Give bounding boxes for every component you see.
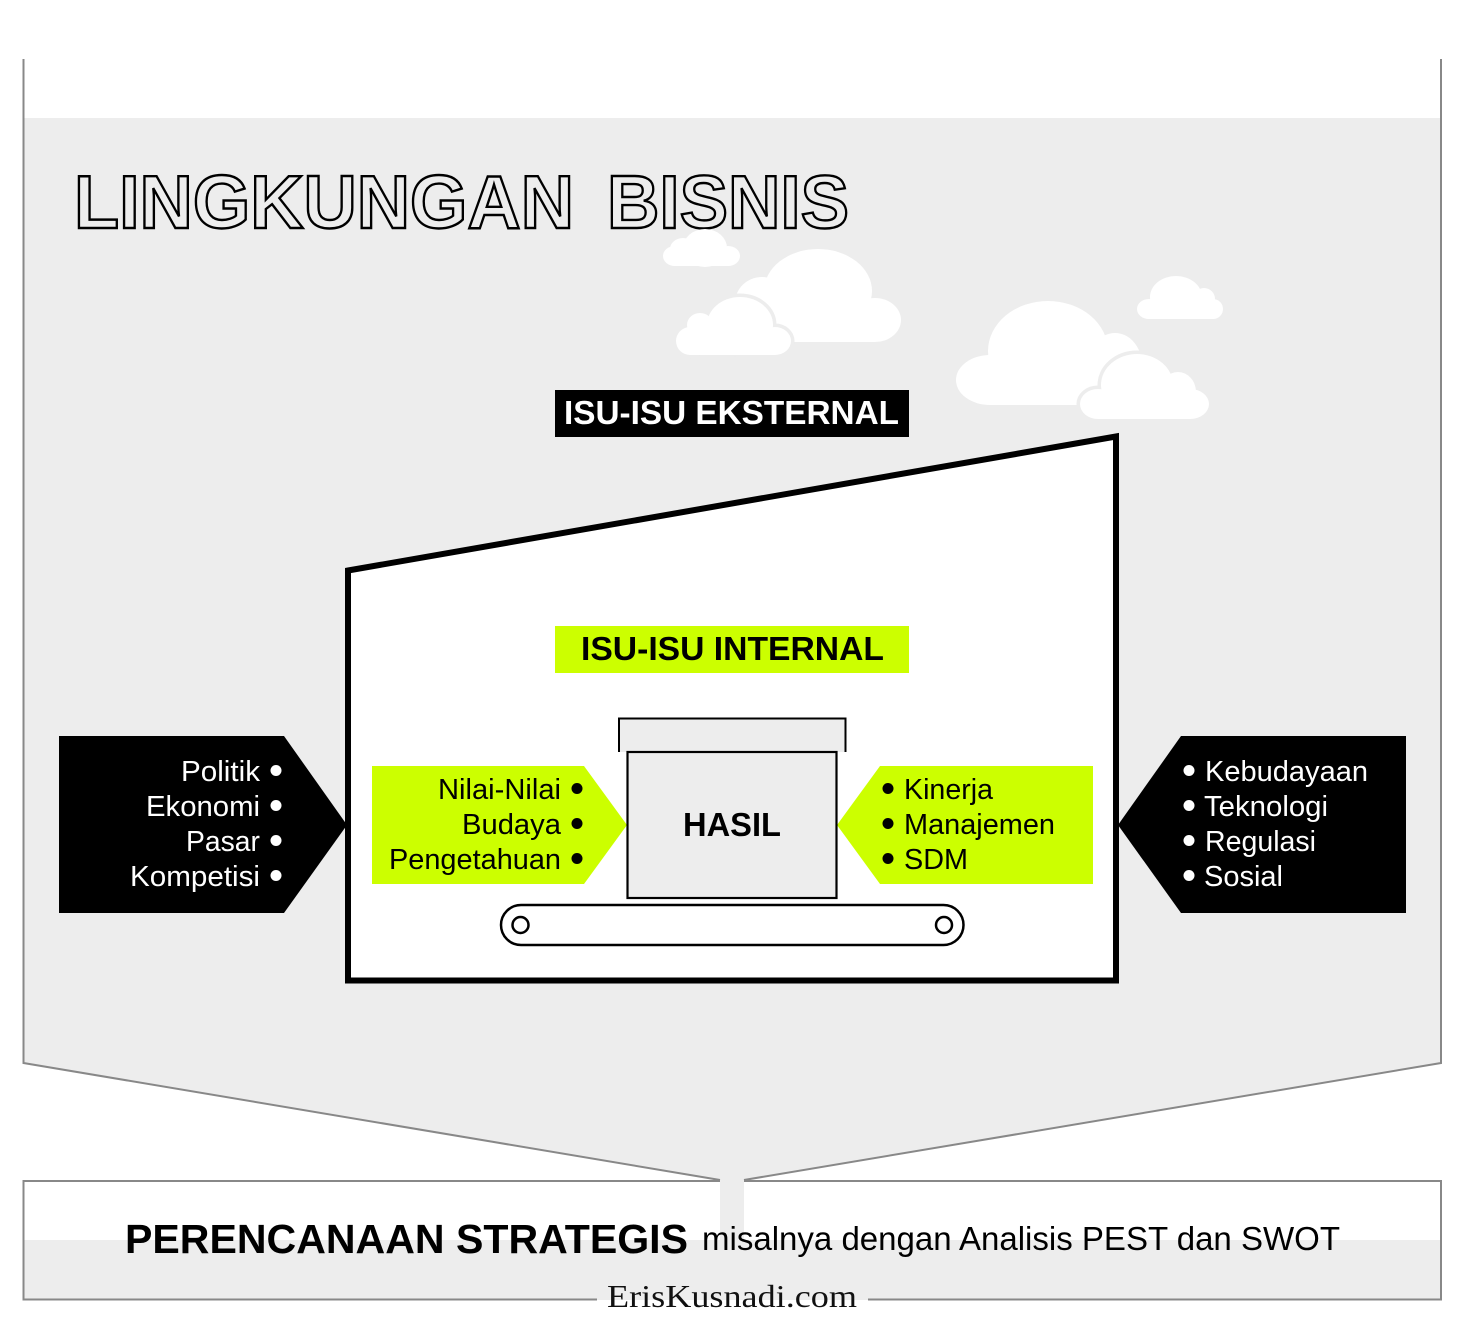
panel: internal factors left: Nilai-Nilai xyxy=(438,774,561,806)
icon: cloud pair right xyxy=(956,301,1209,419)
icon: cloud pair left xyxy=(676,249,901,355)
panel: external factors right: Teknologi xyxy=(1204,791,1328,823)
heading: internal issues xyxy=(555,626,909,673)
icon: conveyor belt xyxy=(501,905,964,945)
result box: HASIL xyxy=(683,806,781,843)
icon: small cloud right xyxy=(1137,276,1223,319)
panel: external factors right xyxy=(1118,736,1406,913)
result box xyxy=(628,752,836,898)
panel: organization building xyxy=(348,436,1116,980)
panel: external factors left: Pasar xyxy=(186,826,260,858)
panel: external factors right: Kebudayaan xyxy=(1205,756,1368,788)
panel: internal factors left: Budaya xyxy=(462,809,562,841)
title: LINGKUNGAN xyxy=(74,160,574,244)
title: BISNIS xyxy=(607,160,849,244)
panel: external factors right: Regulasi xyxy=(1205,826,1316,858)
icon: box lid xyxy=(619,718,846,752)
panel: strategic planning box: misalnya dengan Analisis PEST dan SWOT xyxy=(702,1220,1340,1257)
panel: external factors left: Politik xyxy=(181,756,261,788)
panel: external factors left: Kompetisi xyxy=(130,861,260,893)
panel: strategic planning box xyxy=(24,1181,1441,1300)
icon: box lid outline xyxy=(619,718,846,752)
panel: internal factors right: Manajemen xyxy=(904,809,1055,841)
watermark: ErisKusnadi.com xyxy=(607,1278,857,1314)
icon: small cloud top xyxy=(663,229,740,267)
heading: external issues: ISU-ISU EKSTERNAL xyxy=(564,394,899,431)
panel: external factors right: Sosial xyxy=(1204,861,1283,893)
panel: external factors left: Ekonomi xyxy=(146,791,260,823)
panel: internal factors right xyxy=(837,766,1093,884)
panel: strategic planning box: PERENCANAAN STRATEGIS xyxy=(125,1216,688,1262)
panel: internal factors right: Kinerja xyxy=(904,774,994,806)
heading: internal issues: ISU-ISU INTERNAL xyxy=(581,630,884,667)
title xyxy=(74,160,849,244)
panel: external factors left xyxy=(59,736,347,913)
panel: internal factors left xyxy=(372,766,627,884)
panel: internal factors right: SDM xyxy=(904,844,968,876)
panel: internal factors left: Pengetahuan xyxy=(389,844,561,876)
